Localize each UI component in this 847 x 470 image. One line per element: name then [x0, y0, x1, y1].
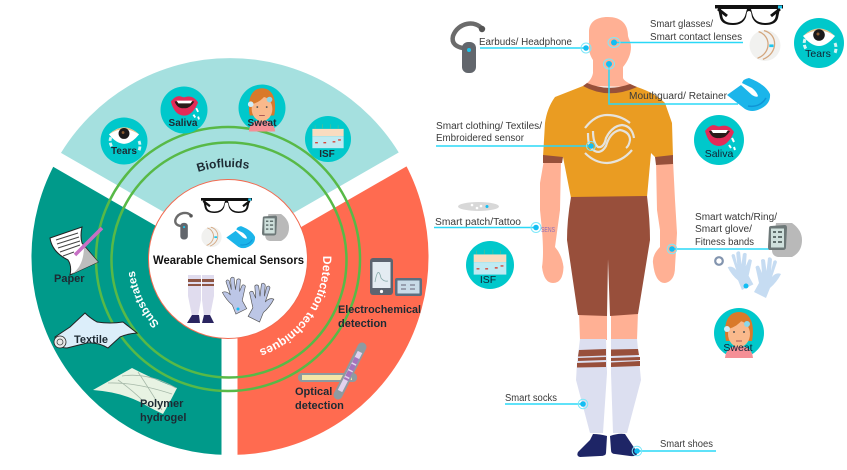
- icon: saliva: [160, 86, 208, 134]
- badge: saliva: Saliva: [705, 148, 733, 160]
- heading: detection techniques: Detection techniques: [260, 256, 332, 355]
- icon: gloves: [222, 277, 274, 322]
- callout: smart watch: [667, 212, 777, 254]
- sleeve trims: [543, 155, 673, 165]
- label: electrochemical detection: detection: [338, 318, 387, 330]
- icon: saliva: Saliva: [169, 118, 198, 129]
- badge: sweat: [714, 308, 764, 358]
- callout: mouthguard: Mouthguard/ Retainer: [629, 91, 728, 102]
- icon: ISF: [305, 116, 351, 162]
- badge: tears: Tears: [805, 48, 831, 60]
- heading: substrates: Substrates: [128, 271, 158, 328]
- icon: polymer hydrogel: [93, 368, 177, 414]
- callout: smart patch: Smart patch/Tattoo: [435, 217, 521, 228]
- sector: substrates: [31, 158, 230, 455]
- shirt: [543, 86, 673, 198]
- icon: sweat: [238, 84, 286, 132]
- label: optical detection: detection: [295, 400, 344, 412]
- center circle: [148, 180, 308, 338]
- callout: earbuds: Earbuds/ Headphone: [479, 37, 572, 48]
- icon: tears: [100, 118, 148, 164]
- callout: smart clothing: Embroidered sensor: [436, 133, 525, 144]
- icon: optical strips: [298, 347, 362, 395]
- callout: smart shoes: Smart shoes: [660, 439, 713, 450]
- callout: smart watch: Fitness bands: [695, 237, 754, 248]
- sector: detection techniques: [230, 158, 429, 455]
- arms: [540, 160, 677, 283]
- panel: wheel of wearable chemical sensors: [31, 58, 428, 455]
- icon: glasses large: [715, 5, 783, 25]
- icon: gloves large: [728, 251, 781, 298]
- badge: ISF: ISF: [480, 274, 496, 286]
- callout: mouthguard: [604, 59, 738, 104]
- shoes: [577, 434, 637, 457]
- icon: mouthguard large: [727, 78, 770, 111]
- callout: earbuds: [479, 37, 591, 53]
- sector: biofluids: [58, 58, 402, 257]
- callout: smart patch: [434, 217, 555, 234]
- callout: smart socks: Smart socks: [505, 393, 557, 404]
- callout: smart clothing: [436, 121, 596, 150]
- socks: [576, 339, 641, 433]
- label: textile: Textile: [74, 334, 108, 346]
- shirt logo: [585, 115, 634, 163]
- callout: smart shoes: [632, 439, 716, 456]
- label: optical detection: [295, 386, 344, 412]
- badge: saliva: [694, 115, 744, 165]
- badge: tears: [794, 18, 844, 68]
- icon: earbud: [175, 213, 193, 239]
- icon: ISF: ISF: [319, 149, 335, 160]
- icon: tears: Tears: [111, 146, 137, 157]
- callout: glasses and lenses: Smart contact lenses: [650, 32, 742, 43]
- badge: ISF: [466, 241, 514, 289]
- label: electrochemical detection: [338, 304, 421, 330]
- label: electrochemical detection: Electrochemical: [338, 304, 421, 316]
- icon: earbud large: [453, 24, 485, 73]
- thighs: [579, 312, 638, 340]
- collar: [583, 83, 637, 93]
- icon: watch: [262, 214, 289, 241]
- sock stripes: [577, 349, 640, 368]
- icon: paper: [50, 227, 102, 275]
- label: polymer hydrogel: hydrogel: [140, 412, 186, 424]
- head and neck: [583, 17, 637, 87]
- icon: sweat: Sweat: [248, 118, 277, 129]
- label: polymer hydrogel: [140, 398, 186, 424]
- icon: textile: [54, 313, 137, 348]
- icon: contact lens: [201, 227, 222, 247]
- icon: smart watch: [768, 223, 802, 257]
- label: polymer hydrogel: Polymer: [140, 398, 184, 410]
- icon: smart patch: [458, 202, 499, 211]
- callout: glasses and lenses: Smart glasses/: [650, 19, 713, 30]
- figure: human body: [540, 17, 677, 457]
- callout: glasses and lenses: [608, 19, 743, 48]
- callout: smart watch: Smart watch/Ring/: [695, 212, 777, 223]
- icon: electrochemical devices: [370, 258, 422, 296]
- callout: smart watch: Smart glove/: [695, 224, 752, 235]
- icon: glasses: [201, 198, 252, 213]
- heading: biofluids: Biofluids: [196, 158, 249, 172]
- callout: smart socks: [505, 393, 588, 409]
- label: paper: Paper: [54, 273, 85, 285]
- label: optical detection: Optical: [295, 386, 332, 398]
- icon: contact lens large: [750, 30, 780, 61]
- icon: ring: [715, 257, 723, 265]
- callout: smart patch: SENS: [541, 227, 555, 234]
- heading: wearable chemical sensors: Wearable Chemical Sensors: [153, 255, 304, 267]
- badge: sweat: Sweat: [723, 342, 753, 354]
- shorts: [567, 196, 650, 316]
- callout: smart clothing: Smart clothing/ Textiles/: [436, 121, 542, 132]
- icon: socks and shoes: [187, 275, 214, 323]
- icon: mouthguard: [226, 226, 255, 248]
